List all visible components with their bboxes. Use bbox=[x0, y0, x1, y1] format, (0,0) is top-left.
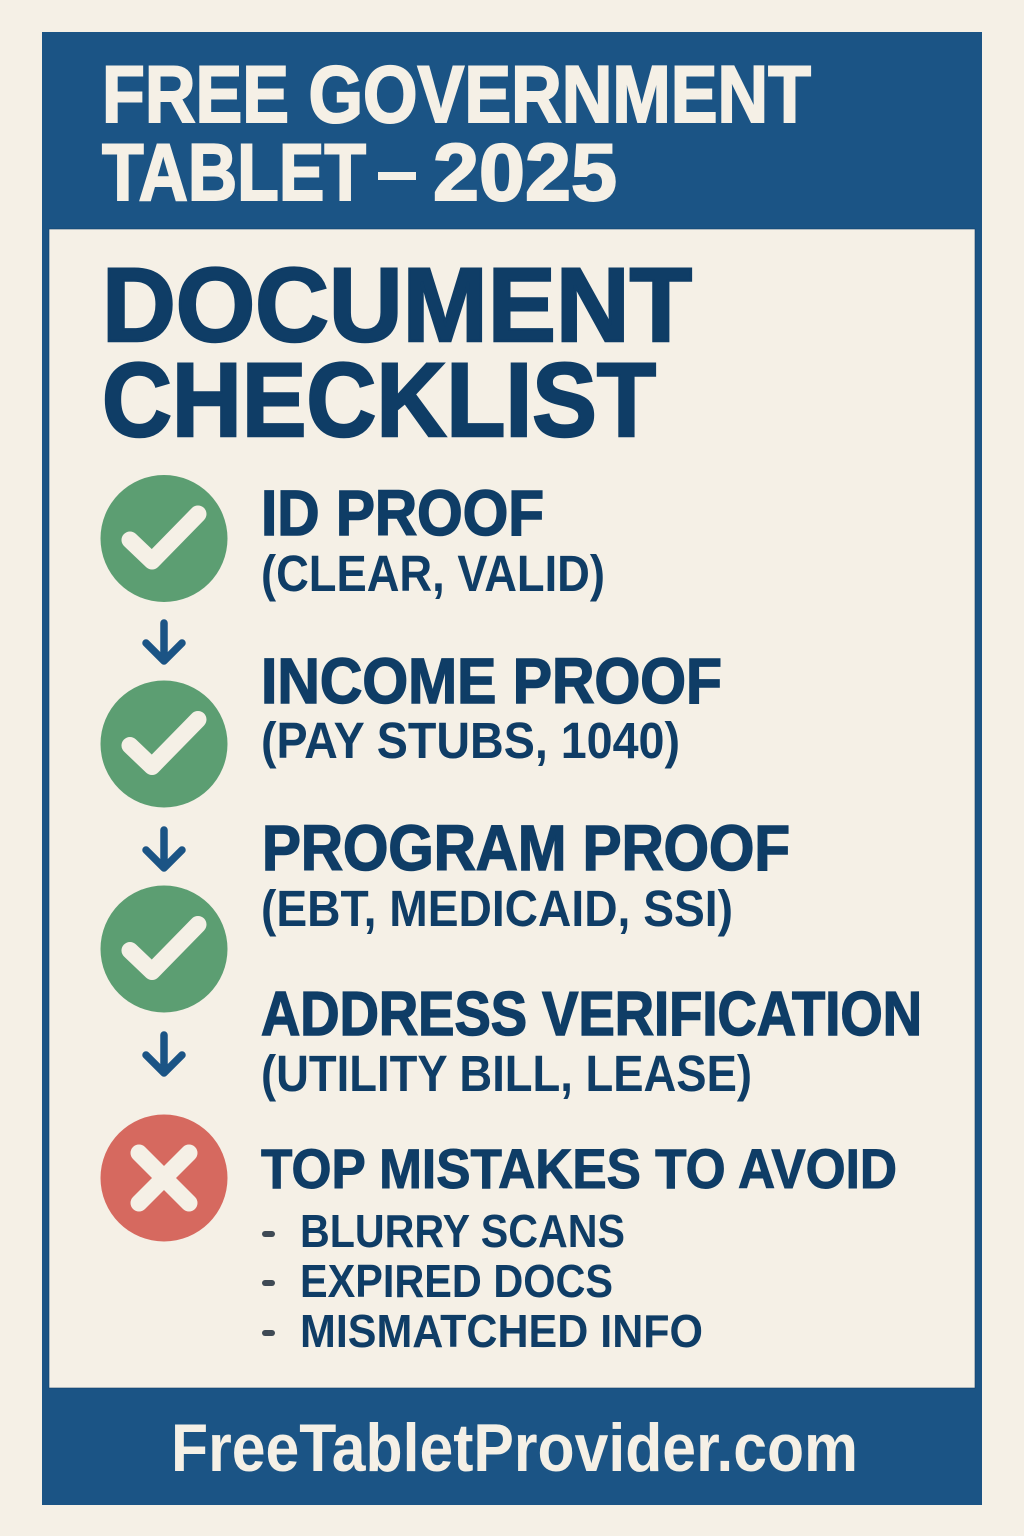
item: program proof: (EBT, MEDICAID, SSI) bbox=[261, 880, 733, 937]
item: address verification bbox=[261, 980, 922, 1102]
item: program proof: PROGRAM PROOF bbox=[262, 812, 790, 884]
title: FREE GOVERNMENT bbox=[102, 50, 811, 140]
heading: document checklist bbox=[102, 247, 692, 459]
item: id proof: (CLEAR, VALID) bbox=[261, 545, 605, 602]
arrow 3 bbox=[146, 1035, 182, 1073]
item: top mistakes heading: TOP MISTAKES TO AVOID bbox=[261, 1137, 897, 1200]
item: id proof bbox=[261, 477, 605, 602]
title: 2025 bbox=[433, 128, 617, 218]
panel: checklist body bbox=[49, 229, 975, 1388]
item: program proof bbox=[261, 812, 790, 937]
icon: check 2 bbox=[100, 680, 228, 808]
item: income proof: (PAY STUBS, 1040) bbox=[261, 712, 680, 769]
icon: check 3 bbox=[100, 886, 228, 1012]
list: mistakes bbox=[262, 1205, 703, 1357]
item: id proof: ID PROOF bbox=[261, 477, 544, 549]
item: address verification: (UTILITY BILL, LEASE) bbox=[261, 1045, 752, 1102]
title bbox=[102, 50, 811, 218]
icon: cross bbox=[100, 1114, 228, 1242]
arrow 1 bbox=[146, 623, 182, 661]
list: mistakes: BLURRY SCANS bbox=[300, 1205, 625, 1257]
list: mistakes: EXPIRED DOCS bbox=[300, 1255, 613, 1307]
list: mistakes: MISMATCHED INFO bbox=[300, 1305, 703, 1357]
footer url: FreeTabletProvider.com bbox=[171, 1410, 858, 1486]
item: income proof bbox=[261, 645, 722, 769]
icon: check 1 bbox=[100, 475, 228, 602]
item: address verification: ADDRESS VERIFICATION bbox=[261, 980, 922, 1049]
title: TABLET bbox=[102, 128, 366, 218]
heading: document checklist: DOCUMENT bbox=[102, 247, 692, 364]
arrow 2 bbox=[146, 830, 182, 868]
item: income proof: INCOME PROOF bbox=[261, 645, 722, 717]
heading: document checklist: CHECKLIST bbox=[102, 342, 656, 459]
